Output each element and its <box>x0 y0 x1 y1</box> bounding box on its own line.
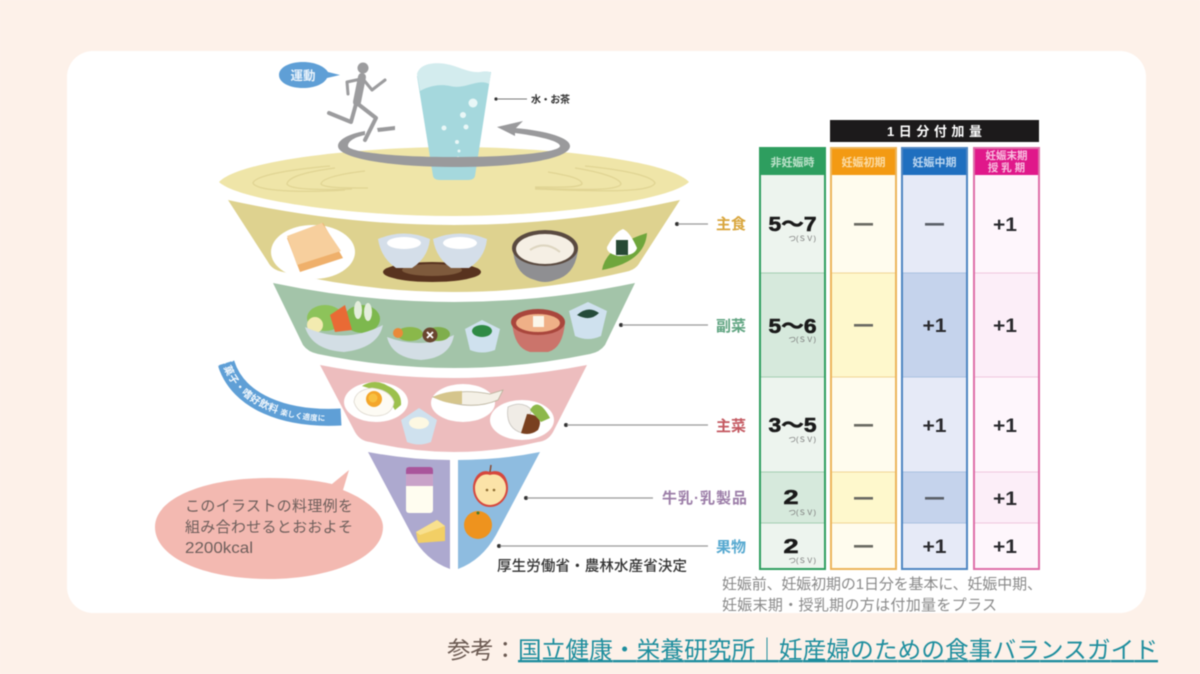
column: mid pregnancy: +1 <box>922 537 947 558</box>
salad bowl <box>305 301 383 352</box>
rotating arrow <box>338 121 570 167</box>
speech bubble: exercise: 運動 <box>290 68 316 83</box>
fish plate <box>431 384 503 422</box>
column: late pregnancy and nursing: +1 <box>993 537 1017 558</box>
column: late pregnancy and nursing: +1 <box>993 316 1017 337</box>
orange <box>464 511 492 539</box>
callout: 2200kcal: 2200kcal <box>185 540 253 557</box>
table super-header <box>830 120 1039 142</box>
simmered vegetables bowl <box>387 327 454 360</box>
small cup: greens <box>465 320 500 352</box>
label: staple foods <box>675 215 746 233</box>
column: late pregnancy and nursing: +1 <box>993 416 1017 437</box>
meat plate <box>490 400 554 440</box>
table note: 妊娠前、妊娠初期の1日分を基本に、妊娠中期、 <box>722 576 1042 593</box>
noodle bowl <box>512 230 578 282</box>
column: non-pregnant: 非妊娠時 <box>770 155 814 169</box>
water glass <box>417 63 491 180</box>
label: staple foods: 主食 <box>716 215 746 233</box>
table super-header: 1 日 分 付 加 量 <box>887 124 982 139</box>
speech bubble: exercise <box>279 62 340 88</box>
credit text: 厚生労働省・農林水産省決定 <box>497 558 687 575</box>
toast on plate <box>271 223 355 279</box>
band: side dishes <box>273 283 635 368</box>
label: fruit <box>497 538 746 556</box>
apple <box>473 465 508 507</box>
column: non-pregnant: 3～5 <box>768 415 816 437</box>
band: main dishes <box>320 365 587 452</box>
column: mid pregnancy <box>901 147 968 569</box>
column: non-pregnant: つ(ＳＶ) <box>788 435 816 444</box>
food pyramid illustration <box>154 61 747 580</box>
column: late pregnancy and nursing: +1 <box>993 489 1017 510</box>
column: non-pregnant: つ(ＳＶ) <box>788 508 816 517</box>
reference source line: 参考： <box>447 637 517 663</box>
top disc <box>219 147 689 216</box>
column: non-pregnant: 2 <box>784 536 798 558</box>
label: side dishes <box>619 318 746 335</box>
rice bowls on tray <box>378 234 487 282</box>
column: early pregnancy <box>830 147 897 569</box>
callout: 2200kcal: このイラストの料理例を <box>185 498 353 515</box>
table note: 妊娠末期・授乳期の方は付加量をプラス <box>722 597 997 614</box>
label: main dishes: 主菜 <box>716 417 746 435</box>
segment: fruit <box>458 452 540 569</box>
column: late pregnancy and nursing: 妊娠末期 <box>986 149 1028 162</box>
column: non-pregnant: つ(ＳＶ) <box>788 234 816 243</box>
label: main dishes <box>564 417 746 435</box>
column: non-pregnant: 5～7 <box>768 214 816 236</box>
tofu cup <box>401 408 437 444</box>
table note <box>722 576 1042 614</box>
label: dairy: 牛乳·乳製品 <box>662 490 747 507</box>
column: late pregnancy and nursing <box>973 147 1040 569</box>
label: fruit: 果物 <box>716 538 746 556</box>
rice ball on leaf <box>602 229 647 270</box>
column: non-pregnant: 5～6 <box>768 316 816 338</box>
segment: dairy <box>368 452 450 569</box>
column: early pregnancy: 妊娠初期 <box>842 155 886 169</box>
label: side dishes: 副菜 <box>716 318 746 335</box>
band: staple foods <box>228 200 680 292</box>
milk glass <box>406 467 433 513</box>
table: daily servings <box>722 120 1042 614</box>
column: non-pregnant: つ(ＳＶ) <box>788 556 816 565</box>
callout: 2200kcal: 組み合わせるとおおよそ <box>185 519 353 536</box>
column: non-pregnant <box>759 147 826 569</box>
column: late pregnancy and nursing: +1 <box>993 215 1017 236</box>
cheese <box>416 520 445 543</box>
label: water and tea <box>494 93 570 106</box>
column: non-pregnant: 2 <box>784 487 798 509</box>
runner <box>329 62 385 140</box>
small cup: seaweed <box>569 302 607 339</box>
miso soup bowl <box>511 309 565 352</box>
fried egg plate <box>344 382 408 422</box>
column: mid pregnancy: +1 <box>922 316 947 337</box>
label: dairy <box>524 490 747 507</box>
column: mid pregnancy: 妊娠中期 <box>912 155 956 169</box>
column: late pregnancy and nursing: 授 乳 期 <box>988 161 1025 174</box>
label: water and tea: 水・お茶 <box>531 93 570 106</box>
reference source line: 国立健康・栄養研究所｜妊産婦のための食事バランスガイド <box>518 637 1158 663</box>
callout: 2200kcal <box>155 470 383 579</box>
ribbon: sweets and drinks: 菓子・嗜好飲料 楽しく適度に <box>222 364 325 422</box>
column: mid pregnancy: +1 <box>922 416 947 437</box>
column: non-pregnant: つ(ＳＶ) <box>788 335 816 344</box>
